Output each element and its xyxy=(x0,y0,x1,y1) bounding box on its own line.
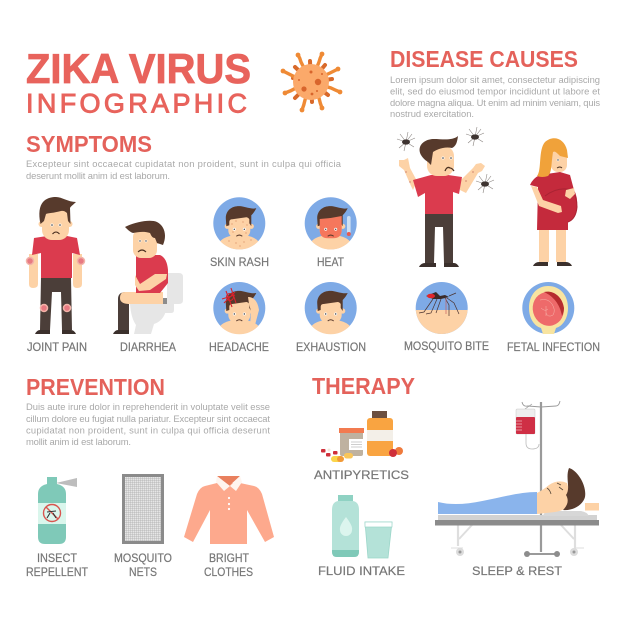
text: prevention description: cupidatat non proident, sunt in culpa qui officia deserunt xyxy=(26,424,270,436)
icon: headache xyxy=(213,282,265,334)
label: bright clothes: CLOTHES xyxy=(204,565,253,579)
label: mosquito nets: MOSQUITO xyxy=(114,551,172,565)
label: mosquito nets xyxy=(114,551,172,579)
label: antipyretics: ANTIPYRETICS xyxy=(314,468,409,482)
text: disease causes description: Lorem ipsum dolor sit amet, consectetur adipiscing xyxy=(390,74,600,85)
text: prevention description: Duis aute irure dolor in reprehenderit in voluptate velit esse xyxy=(26,401,270,412)
subtitle: Infographic: INFOGRAPHIC xyxy=(26,88,247,118)
heading: prevention: PREVENTION xyxy=(26,374,165,400)
icon: bright shirt xyxy=(184,476,274,544)
text: disease causes description: elit, sed do eiusmod tempor incididunt ut labore et xyxy=(390,86,600,96)
icon: mosquito bite xyxy=(416,282,468,334)
icon: mosquito net xyxy=(122,474,164,544)
label: bright clothes xyxy=(204,551,253,579)
icon: water bottle and glass xyxy=(332,495,392,558)
figure: pregnant woman xyxy=(530,138,577,266)
icon: fetal infection xyxy=(522,282,574,334)
icon: virus xyxy=(281,52,342,112)
heading: disease causes: DISEASE CAUSES xyxy=(390,46,578,72)
text: symptoms description xyxy=(26,158,342,181)
label: insect repellent: REPELLENT xyxy=(26,565,89,579)
title: Zika Virus: ZIKA VIRUS xyxy=(26,45,251,92)
text: prevention description xyxy=(26,401,270,447)
text: disease causes description: dolore magna aliqua. Ut enim ad minim veniam, quis xyxy=(390,97,600,108)
label: skin rash: SKIN RASH xyxy=(210,255,269,269)
label: fetal infection: FETAL INFECTION xyxy=(507,340,600,354)
icon: skin rash xyxy=(213,197,265,250)
figure: patient in hospital bed with IV drip xyxy=(435,401,599,557)
label: sleep and rest: SLEEP & REST xyxy=(472,564,563,578)
label: exhaustion: EXHAUSTION xyxy=(296,340,366,354)
figure: man bitten by mosquitoes xyxy=(397,127,494,267)
icon: heat xyxy=(305,197,357,250)
label: insect repellent: INSECT xyxy=(37,551,78,565)
text: disease causes description: nostrud exercitation. xyxy=(390,108,474,119)
label: mosquito bite: MOSQUITO BITE xyxy=(404,339,489,353)
heading: symptoms: SYMPTOMS xyxy=(26,131,152,157)
icon: insect repellent spray xyxy=(38,477,77,544)
text: prevention description: cillum dolore eu fugiat nulla pariatur. Excepteur sint occaecat xyxy=(26,413,270,424)
icon: exhaustion xyxy=(305,282,357,334)
label: diarrhea: DIARRHEA xyxy=(120,340,176,354)
label: mosquito nets: NETS xyxy=(129,565,157,579)
figure: diarrhea man on toilet xyxy=(113,221,183,334)
label: fluid intake: FLUID INTAKE xyxy=(318,564,405,578)
label: bright clothes: BRIGHT xyxy=(209,551,250,565)
heading: therapy: THERAPY xyxy=(312,373,415,399)
figure: joint pain man xyxy=(26,197,84,334)
text: symptoms description: deserunt mollit anim id est laborum. xyxy=(26,170,170,181)
label: joint pain: JOINT PAIN xyxy=(27,340,87,354)
text: prevention description: mollit anim id est laborum. xyxy=(26,436,131,447)
label: insect repellent xyxy=(26,551,89,579)
label: heat: HEAT xyxy=(317,255,345,269)
text: symptoms description: Excepteur sint occaecat cupidatat non proident, sunt in culpa qui officia xyxy=(26,158,342,169)
text: disease causes description xyxy=(390,74,600,119)
label: headache: HEADACHE xyxy=(209,340,269,354)
icon: antipyretic medicines xyxy=(321,411,403,462)
